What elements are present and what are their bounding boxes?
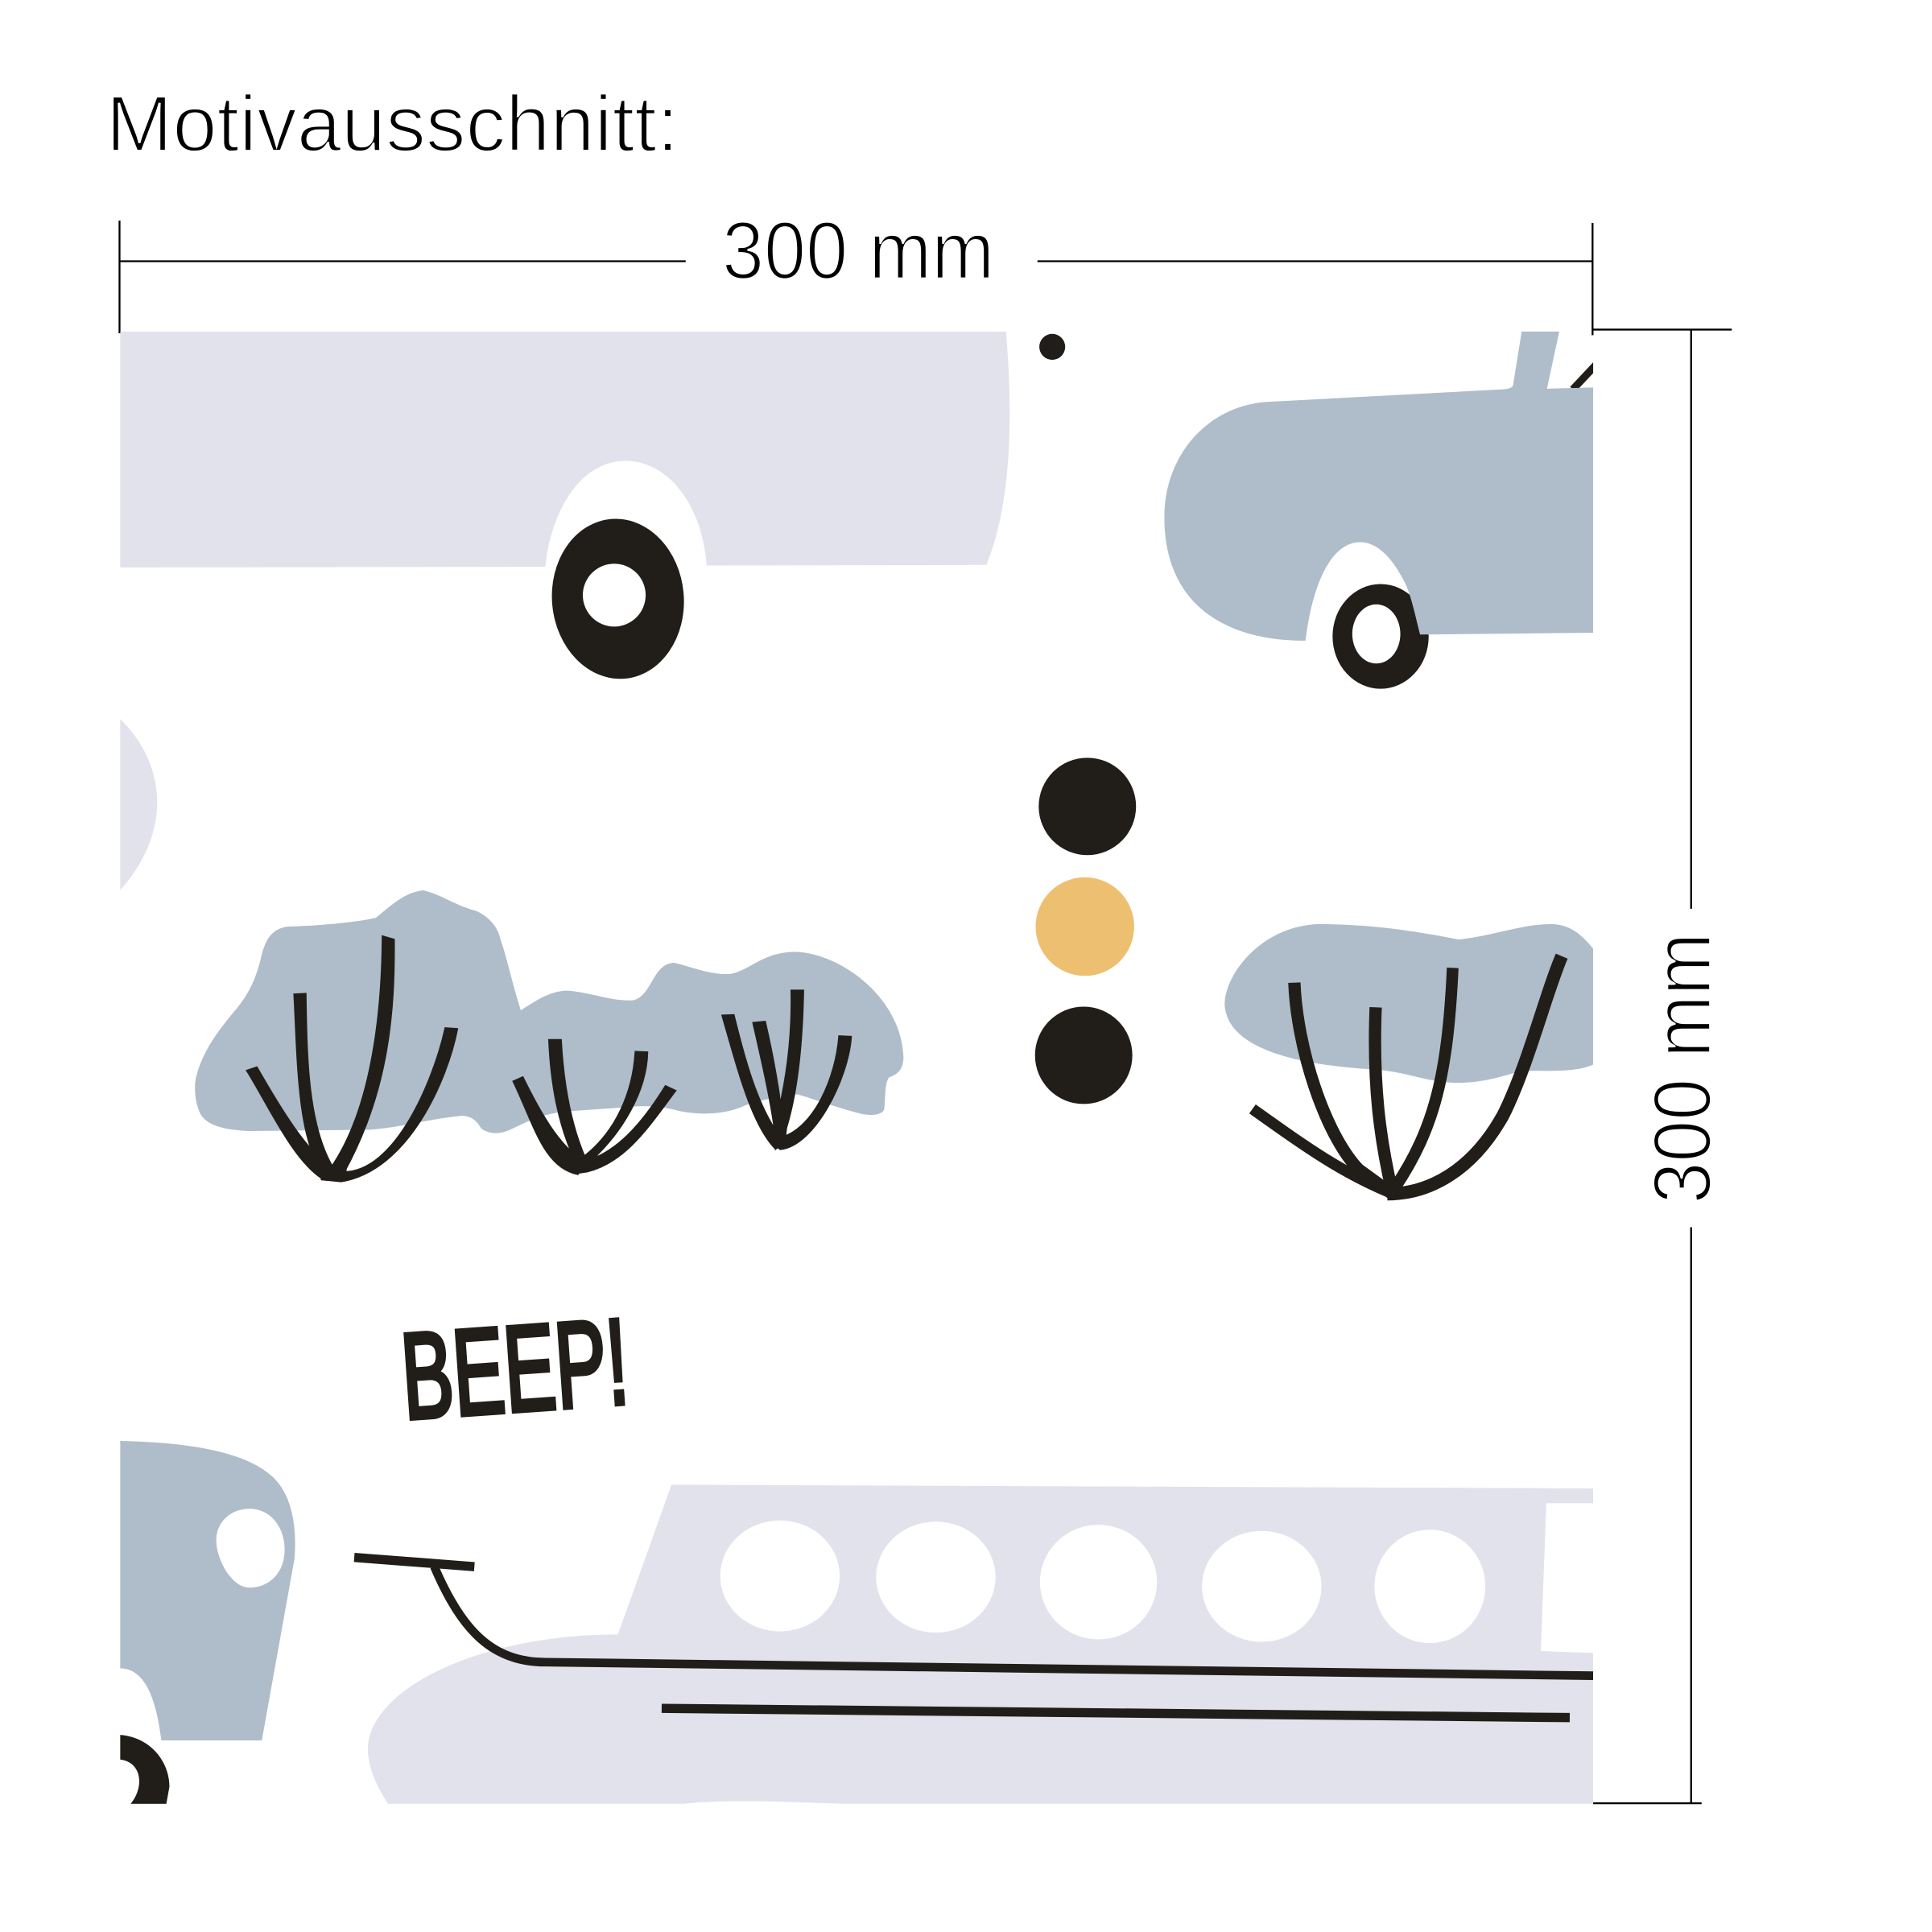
stems of second plant bbox=[514, 1040, 675, 1174]
lower left blue truck bbox=[120, 1441, 295, 1804]
BEEP! lettering: BEEP! bbox=[397, 1293, 633, 1445]
vertical dimension: 300 mm: 300 mm bbox=[1637, 933, 1728, 1203]
horizontal dimension: 300 mm: 300 mm bbox=[722, 206, 994, 296]
stems of first plant bbox=[247, 936, 457, 1181]
blue truck with wheel bbox=[1164, 332, 1602, 689]
boat lines bbox=[354, 1558, 1593, 1718]
title: Motivausschnitt: bbox=[106, 80, 679, 168]
three dots: black, yellow, black bbox=[1035, 758, 1136, 1104]
lilac boat bbox=[354, 1484, 1593, 1804]
blue bush shape bbox=[195, 890, 903, 1133]
lilac half circle at left edge bbox=[120, 719, 157, 890]
lilac bus with wheel bbox=[120, 332, 1009, 684]
small black dot bbox=[1039, 334, 1065, 360]
boat windows bbox=[720, 1503, 1593, 1653]
left bush group bbox=[195, 890, 903, 1181]
right bush bbox=[1224, 924, 1593, 1194]
motif panel bbox=[120, 332, 1602, 1804]
stems of third plant bbox=[723, 991, 851, 1149]
